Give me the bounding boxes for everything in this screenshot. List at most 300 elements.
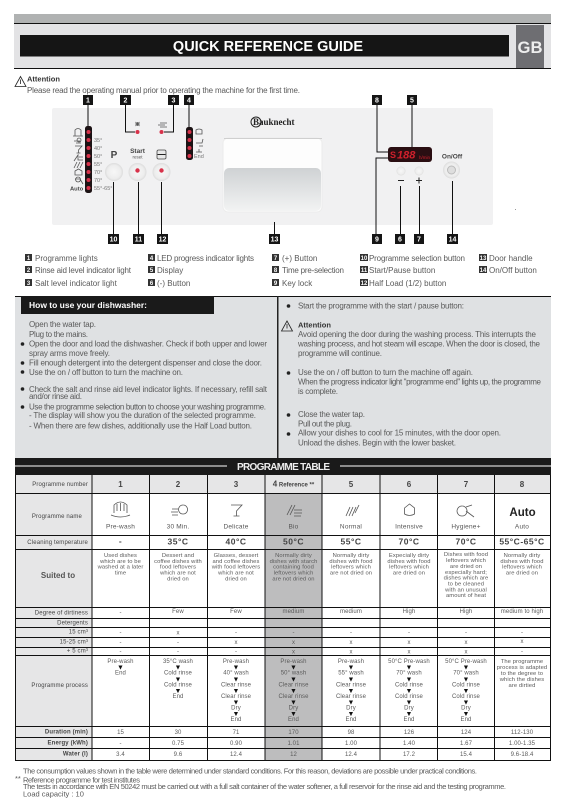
legend: Programme lights [35,254,98,263]
left steps: Open the water tap. [29,320,96,329]
row: suited to: coffee dishes with [154,559,202,565]
row: suited to: with an unusual [444,588,487,594]
row: programme process: process is adapted [497,665,547,671]
legend: Salt level indicator light [35,279,118,288]
attention notice: Attention [27,74,60,84]
right steps: programme will continue. [298,349,382,358]
row: programme process: ▼ [175,688,181,695]
row: programme process: Clear rinse [336,694,367,700]
legend: Time pre-selection [282,266,344,275]
row: programme process: ▼ [233,700,239,706]
left steps: and/or rinse aid. [29,392,82,401]
row: suited to: especially hard; [445,570,487,576]
row: programme process: Dry [461,706,471,712]
button: start pause [128,148,146,181]
icon: normal [346,505,359,516]
legend: Key lock [282,279,313,288]
row: programme process: ▼ [290,688,297,695]
row: duration: 112-130 [511,730,534,736]
row: detergents: x [176,630,180,636]
legend: 7 [274,256,278,262]
panel: control panel [52,108,493,225]
row: detergents: - [408,630,410,636]
row: detergents: + 5 cm³ [67,648,88,654]
row: programme number [32,480,525,489]
title [20,35,509,56]
row: programme process: End [173,694,183,700]
row: programme name: Programme name [32,514,83,520]
row: detergents: - [119,640,122,646]
row: cleaning temperature: - [119,536,122,546]
row: programme process: 35°C wash [163,659,193,665]
row: suited to: leftovers which [389,564,429,570]
row: programme process: Pre-wash [338,659,364,665]
legend: 8 [274,268,278,274]
row: detergents: - [350,630,352,636]
right steps: Unload the dishes. Begin with the lower basket. [298,438,456,448]
row: detergents: Detergents [57,620,88,626]
rinse aid indicator [135,122,140,134]
row: programme number: 2 [176,480,181,489]
callout number tags: 4 [187,98,191,104]
row: suited to: leftovers which [274,570,313,576]
row: programme name: 30 Min. [167,524,189,530]
legend: Programme selection button [369,254,465,263]
row: programme process: End [461,717,471,723]
row: cleaning temperature: 40°C [226,536,246,546]
callout number tags: 5 [410,98,414,104]
row: energy: 1.00 [345,741,358,747]
row: energy: Energy (kWh) [48,740,88,746]
row: detergents: x [407,640,411,646]
row: programme process: ▼ [348,688,354,695]
row: detergents: - [119,649,122,655]
legend: Rinse aid level indicator light [35,266,132,275]
row: detergents: x [520,639,524,645]
buttons: minus and plus [396,166,424,184]
row: duration: 15 [117,730,124,736]
row: programme process: ▼ [233,664,239,672]
row: programme process: ▼ [175,676,181,684]
row: degree of dirtiness: - [119,610,122,616]
row: cleaning temperature: 55°C [340,536,362,546]
row: detergents: - [235,649,237,655]
row: suited to: Dessert and [162,553,194,559]
row: detergents: - [465,630,467,636]
row: programme name: Bio [288,524,299,530]
row: programme process: Cold rinse [452,694,481,700]
row: detergents: x [464,640,468,646]
legend: Start/Pause button [369,266,435,275]
button: programme selection: P [111,150,118,161]
row: water: Water (l) [63,752,88,758]
row: programme process: Clear rinse [221,682,252,688]
footnotes: ** [15,774,21,783]
icon: warning triangle [282,321,292,331]
row: detergents: - [521,630,523,636]
row: detergents: x [407,650,411,656]
row: degree of dirtiness: medium to high [501,609,543,615]
icon: pre-wash [111,502,130,517]
row: detergents: - [292,630,295,636]
row: suited to: food leftovers [160,564,196,570]
row: programme process: Pre-wash [223,659,249,665]
row: programme name: Hygiene+ [451,524,481,530]
row: programme process: Cold rinse [452,682,481,688]
legend: 11 [361,268,368,274]
row: cleaning temperature: 70°C [398,536,420,546]
row: detergents: x [292,650,295,656]
callout number tags: 8 [375,98,379,104]
row: programme process: Dry [289,706,298,712]
legend: 12 [361,281,368,287]
row: energy [48,740,536,747]
row: suited to [41,552,544,599]
row: duration: 170 [288,730,299,736]
row: suited to: are dried on [393,570,425,576]
row: detergents: - [235,630,237,636]
row: detergents: x [349,640,353,646]
legend: 9 [274,281,278,287]
row: degree of dirtiness: medium [340,609,362,615]
row: suited to: leftovers which [331,564,371,570]
row: duration: 71 [233,730,240,736]
row: detergents [57,620,524,656]
row: water: 12.4 [345,752,358,758]
callout leader lines [88,105,452,234]
row: programme process: Clear rinse [278,682,309,688]
brand logo: Bauknecht [253,117,295,127]
button: on off [442,154,463,178]
row: suited to: which are not [159,570,196,576]
left steps: Open the door and load the dishwasher. Check if both upper and lower [29,340,267,348]
heading [21,296,214,314]
row: programme process: ▼ [406,688,412,695]
legend: 6 [150,281,154,287]
row: detergents: - [177,649,179,655]
programme lights: 35° [94,138,102,144]
row: suited to: to be cleaned [448,582,484,588]
callout number tags [83,95,458,244]
row: suited to: which are not [217,570,254,576]
row: programme name: Intensive [395,524,423,530]
icon: hygiene [457,505,474,517]
row: programme process: 50° wash [281,670,306,676]
row: cleaning temperature: 35°C [168,536,188,546]
row: programme number: 6 [407,480,412,489]
row: programme process: which the dishes [499,677,544,683]
row: programme number: Programme number [32,482,88,488]
left steps: Check the salt and rinse aid level indicator lights. If necessary, refill salt [29,385,268,394]
row: programme process: ▼ [463,688,469,695]
display [388,147,432,162]
programme lights: 40° [94,146,102,152]
title: QUICK REFERENCE GUIDE [173,39,363,55]
row: duration: 98 [348,730,355,736]
row: programme process: Cold rinse [395,682,424,688]
row: programme number: 4 Reference ** [273,480,315,488]
left steps: Plug to the mains. [29,330,88,339]
row: programme process: ▼ [463,700,469,706]
legend: (-) Button [157,279,190,288]
icon: 30 min [171,505,188,515]
row: water: 12.4 [230,752,243,758]
row: degree of dirtiness: High [403,609,415,615]
programme lights: 55°-65° [94,186,112,192]
row: energy: 1.67 [460,741,473,747]
LED progress lights [186,127,204,160]
row: detergents: x [349,650,353,656]
row: energy: - [119,741,122,747]
row: suited to: dishes with starch [270,559,317,565]
row: programme process: ▼ [290,700,297,706]
right steps [282,302,542,448]
left steps: Use the programme selection button to choose your washing programme. [29,402,266,412]
right steps: Start the programme with the start / pause button: [298,302,464,310]
left steps [21,320,268,430]
row: energy: 0.90 [230,741,243,747]
programme lights [70,126,112,193]
row: programme process: ▼ [290,664,297,672]
row: programme process: ▼ [463,711,469,718]
row: water: 12 [290,752,297,758]
row: cleaning temperature: 55°C-65°C [499,536,545,546]
row: programme process: End [115,670,126,676]
row: programme process: Dry [346,706,356,712]
row: programme process: 50°C Pre-wash [445,659,487,665]
legend: 5 [150,268,154,274]
row: degree of dirtiness: Few [230,609,242,615]
row: programme process: End [231,717,241,723]
legend: 13 [480,256,487,262]
right steps: Use the on / off button to turn the machine off again. [298,368,473,377]
row: suited to: amount of heat [446,593,486,599]
legend: 2 [27,268,31,274]
row: programme name: Delicate [223,524,249,530]
callout number tags: 7 [417,236,421,244]
language tag: GB [518,38,542,57]
row: water: 9.6-18.4 [511,752,534,758]
row: programme process: Cold rinse [395,694,424,700]
row: suited to: are dried on [450,564,482,570]
left steps: Use the on / off button to turn the machine on. [29,368,183,377]
row: programme process: ▼ [117,664,124,672]
callout number tags: 14 [449,236,456,244]
row: programme process: Cold rinse [164,670,193,676]
footnotes: Load capacity : 10 [23,790,84,798]
row: programme name: Pre-wash [106,524,135,530]
right steps: Avoid opening the door during the washing process. This interrupts the [298,330,537,339]
right steps: Pull out the plug. [298,420,352,428]
row: duration [45,730,534,736]
legend: (+) Button [282,254,317,263]
row: programme process: Clear rinse [221,694,252,700]
row: cleaning temperature: 50°C [283,536,304,546]
row: suited to: Normally dirty [333,553,369,559]
legend: LED progress indicator lights [157,254,254,263]
row: programme process: End [346,717,356,723]
row: suited to: are dried on [506,570,538,576]
row: programme name: Auto [515,524,529,530]
icon: warning triangle [15,76,26,86]
row: programme number: 5 [349,480,354,489]
row: programme process: 50°C Pre-wash [388,659,430,665]
row: programme process: Cold rinse [164,682,193,688]
right steps: When the progress indicator light "programme end" lights up, the programme [298,378,542,386]
button: half load [152,150,170,181]
row: degree of dirtiness: Few [172,609,184,615]
heading: How to use your dishwasher: [29,300,147,310]
row: programme process: ▼ [406,676,412,684]
row: programme process: End [288,717,299,723]
row: water: 15.4 [460,752,473,758]
row: suited to: Expecially dirty [389,553,429,559]
row: programme process: ▼ [290,676,297,684]
row: cleaning temperature: Cleaning temperature [27,540,89,546]
row: detergents: x [464,650,468,656]
row: detergents: - [521,649,523,655]
callout number tags: 9 [375,236,379,244]
row: programme process: are dirtied [509,683,535,689]
row: programme process: 70° wash [453,670,479,676]
right steps: Attention [298,320,331,330]
row: water: 9.6 [174,752,183,758]
display: S [390,150,396,160]
row: duration: Duration (min) [45,730,88,736]
attention notice [15,74,300,95]
row: duration: 126 [404,730,415,736]
row: energy: 1.01 [287,741,300,747]
display: 188 [397,150,416,162]
button: start pause: Start [130,148,146,155]
icon: bio [287,505,302,516]
row: programme process: Dry [231,706,241,712]
panel: how to use [15,296,551,458]
row: suited to: which are to be [99,559,141,565]
footnotes: The tests in accordance with EN 50242 must be carried out with a full salt container of the water softener, a full reservoir for the rinse aid and the testing programme. [23,782,506,791]
door handle [223,138,322,212]
row: suited to: Dishes with food [444,552,488,558]
row: energy: 1.00-1.35 [509,741,536,747]
row: suited to: are not dried on [330,570,372,576]
row: degree of dirtiness: Degree of dirtiness [35,610,88,616]
row: programme process: 40° wash [223,670,249,676]
button: programme selection [105,150,123,181]
callout number tags: 10 [110,236,117,244]
display: h/min [419,155,431,160]
left steps: - When there are few dishes, additionally use the Half Load button. [29,422,252,430]
left steps: - The display will show you the duration of the selected programme. [29,411,256,420]
row: programme process: Pre-wash [280,659,307,665]
row: detergents: - [177,640,179,646]
header band [14,14,551,69]
icon: intensive [404,504,414,516]
callout number tags: 3 [172,98,176,104]
language tag [516,25,544,68]
row: programme process: ▼ [290,711,297,718]
callout number tags: 2 [124,98,128,104]
row: programme process: Pre-wash [107,659,134,665]
callout number tags: 11 [135,236,142,244]
left steps: spray arms move freely. [29,349,110,358]
row: suited to: washed at a later [97,564,143,570]
legend: On/Off button [489,266,537,275]
footnotes: The consumption values shown in the table were determined under standard conditions. For this reason, deviations are possible under practical conditions. [23,766,477,776]
row: programme process: The programme [501,659,543,665]
row: programme name [32,502,536,530]
row: energy: 0.75 [172,741,185,747]
row: suited to: Suited to [41,571,75,580]
legend: 1 [27,256,31,262]
row: programme process: Dry [404,706,414,712]
row: energy: 1.40 [403,741,416,747]
legend: 4 [150,256,154,262]
row: programme process: ▼ [175,664,181,672]
row: degree of dirtiness: medium [283,609,304,615]
row: suited to: Glasses, dessert [214,553,259,559]
row: programme process: ▼ [233,688,239,695]
row: programme process: 70° wash [396,670,422,676]
row: programme process: ▼ [233,676,239,684]
legend: 3 [27,281,31,287]
row: duration: 124 [461,730,472,736]
row: suited to: are not dried on [272,576,315,582]
row: programme number: 1 [118,480,123,489]
row: cleaning temperature [27,536,545,546]
row: programme process: ▼ [463,664,469,672]
legend: Half Load (1/2) button [369,279,446,288]
row: suited to: Normally dirty [504,553,540,559]
row: suited to: Used dishes [104,553,137,559]
callout number tags: 12 [159,236,166,244]
row: suited to: time [115,570,126,576]
legend: Door handle [489,254,533,263]
row: programme process: ▼ [348,664,354,672]
row: programme process: ▼ [348,711,354,718]
row: programme process: ▼ [463,676,469,684]
programme lights: 55° [94,162,102,168]
row: suited to: leftovers which [446,558,486,564]
row: programme process: ▼ [348,676,354,684]
icon: auto: Auto [509,507,536,519]
row: suited to: dishes with food [500,559,544,565]
legend: 14 [480,268,487,274]
row: programme name: Normal [340,524,362,530]
row: cleaning temperature: 70°C [456,536,476,546]
right steps: is complete. [298,387,338,396]
row: programme process: End [404,717,414,723]
row: suited to: dried on [167,576,189,582]
callout number tags: 6 [398,236,402,244]
row: suited to: and coffee dishes [212,559,260,565]
row: programme process: Clear rinse [336,682,367,688]
programme lights: 70° [94,178,102,184]
row: programme process: ▼ [406,700,412,706]
table heading: PROGRAMME TABLE [237,462,330,473]
row: suited to: Normally dirty [275,553,312,559]
legend [25,254,537,288]
row: programme process: ▼ [233,711,239,718]
footnotes [15,766,506,798]
table shading [15,475,551,760]
programme lights: 50° [94,154,102,160]
row: duration: 30 [175,730,182,736]
row: water [63,752,534,758]
right steps: Allow your dishes to cool for 15 minutes, with the door open. [298,428,501,438]
row: programme process [31,659,547,723]
callout number tags: 13 [271,236,278,244]
row: suited to: containing food [273,564,314,570]
